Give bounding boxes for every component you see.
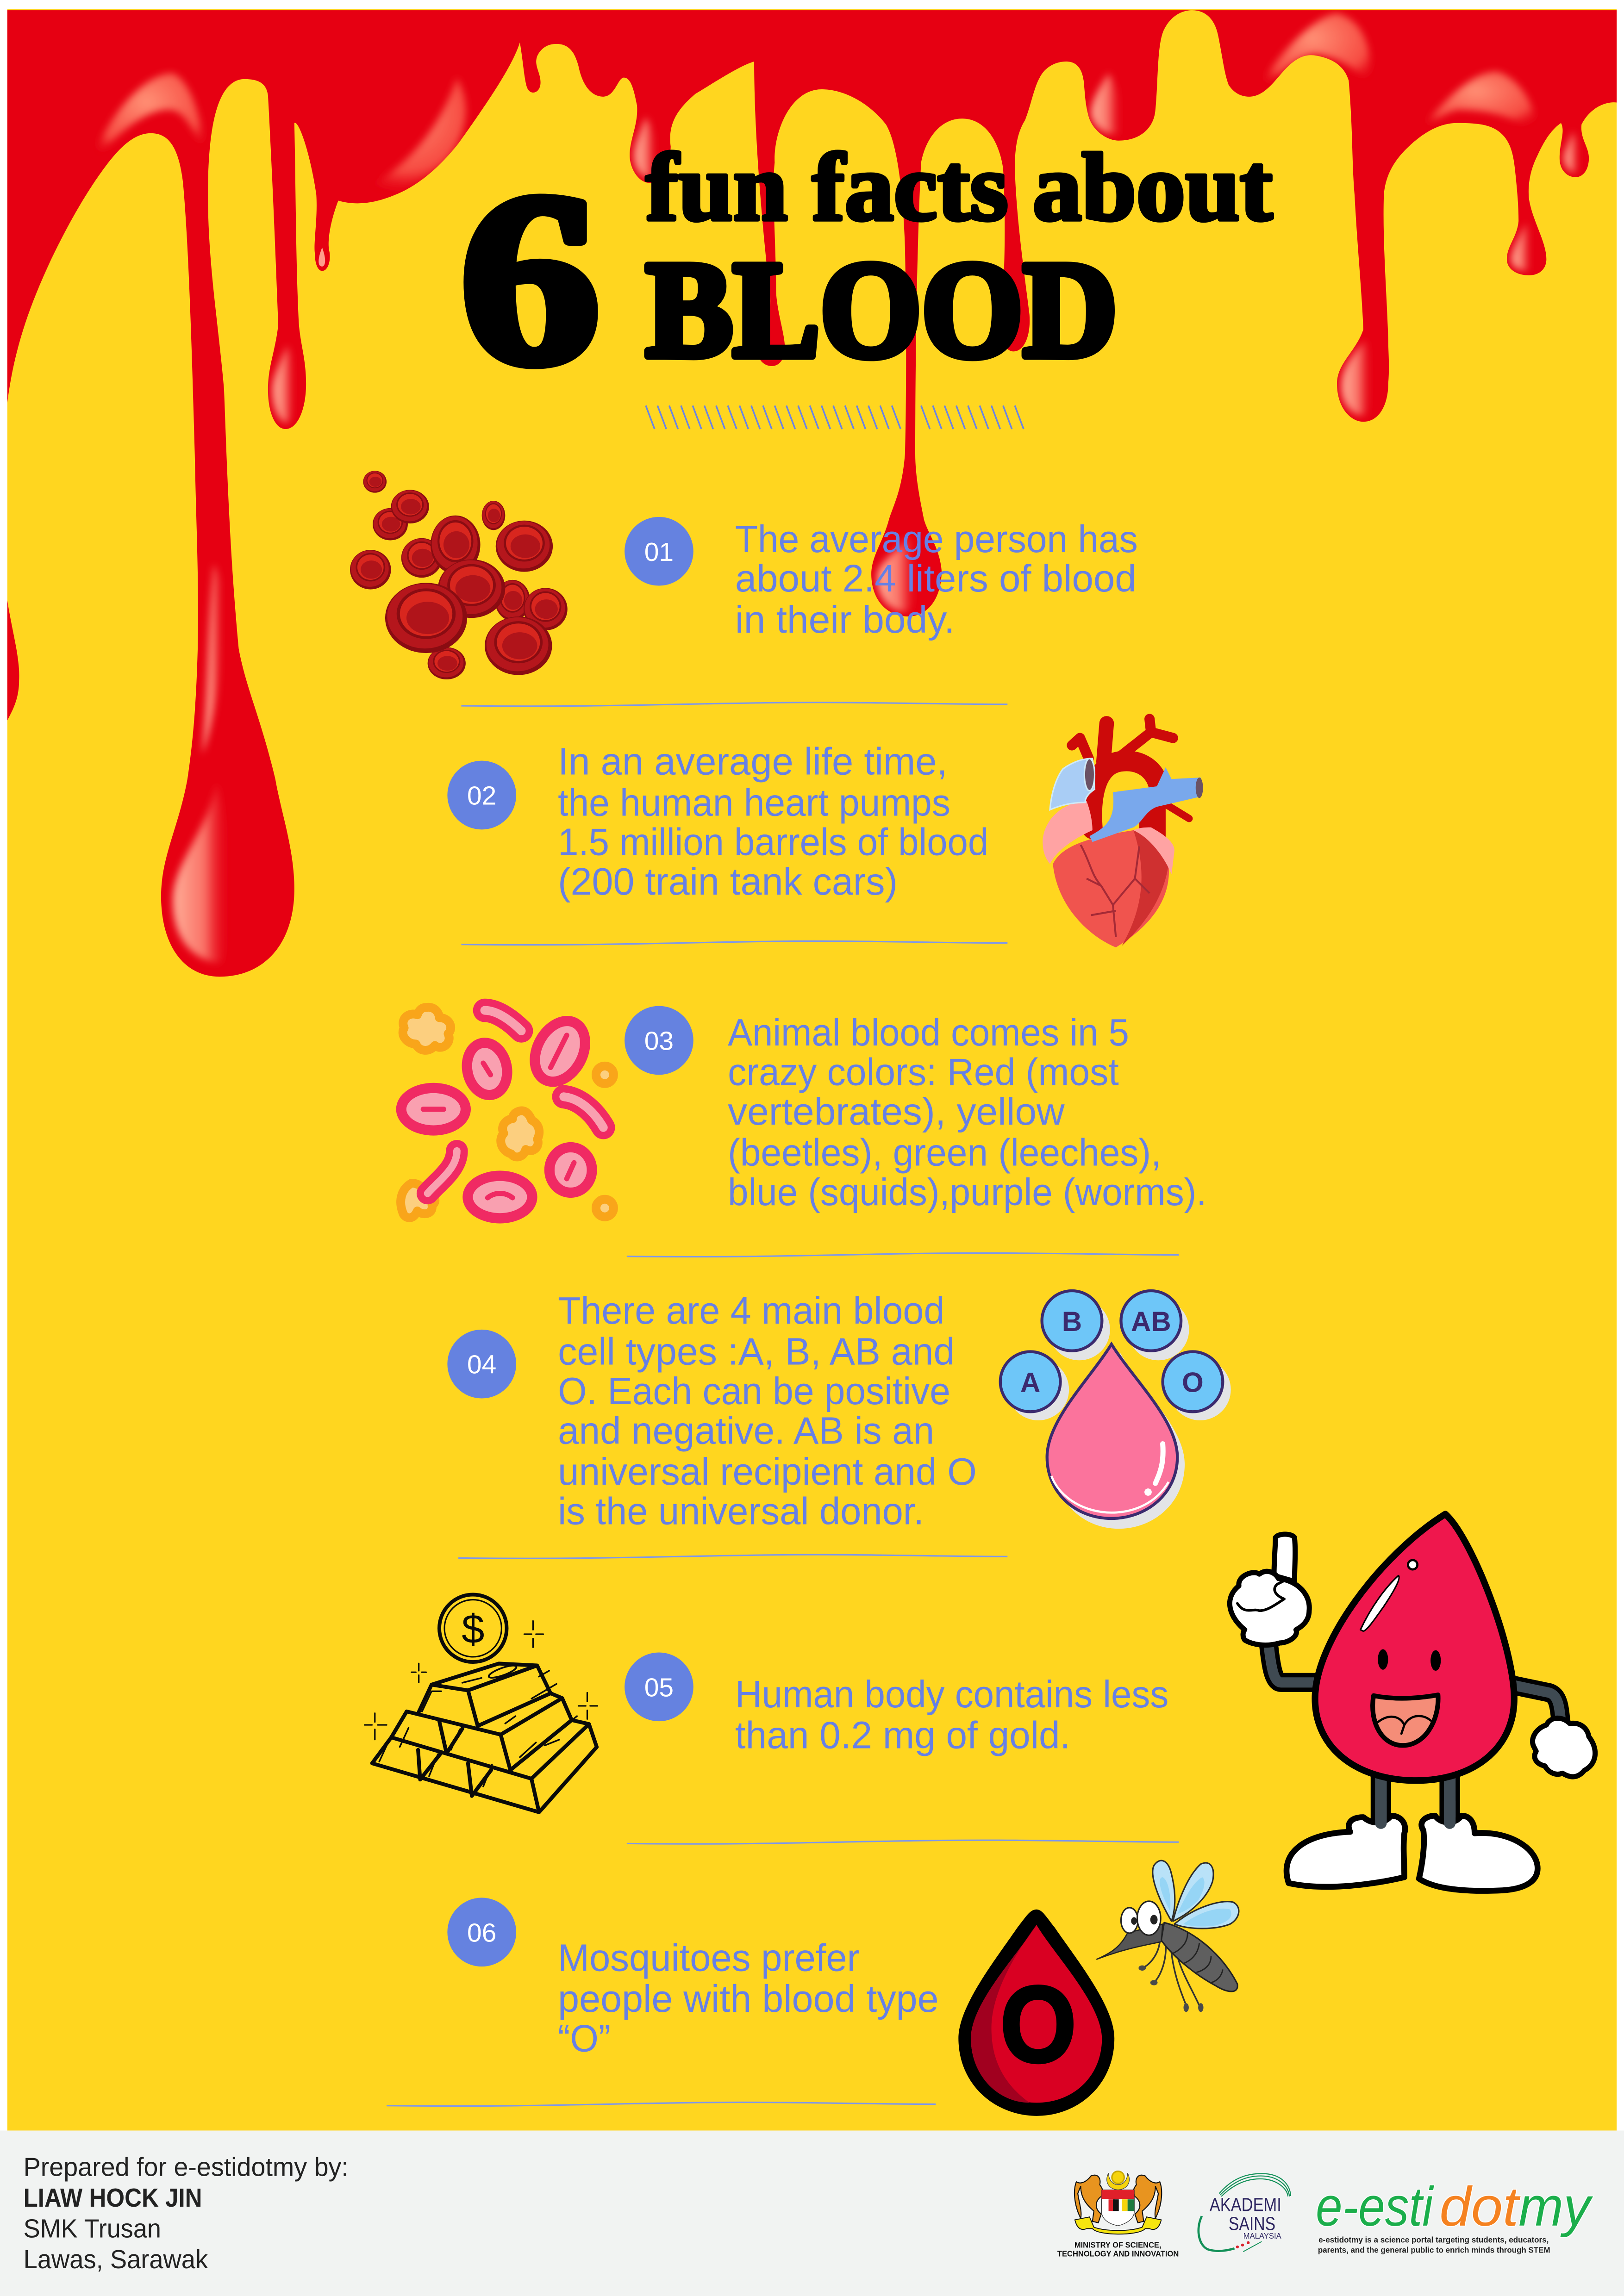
fact text 05: than 0.2 mg of gold.	[735, 1715, 1070, 1757]
number badge 03	[625, 1006, 693, 1075]
icon: red blood cells	[350, 471, 568, 679]
divider	[387, 2102, 936, 2106]
fact text 02	[558, 741, 988, 903]
panel: fact 06	[447, 1860, 1239, 2116]
blood highlights	[88, 13, 1580, 964]
logo: Ministry of Science, Technology and Innovation: MINISTRY OF SCIENCE,	[1074, 2240, 1161, 2250]
fact text 03: vertebrates), yellow	[728, 1091, 1065, 1133]
fact text 04: is the universal donor.	[558, 1491, 924, 1533]
divider	[461, 703, 1007, 706]
panel: fact 04	[447, 1290, 1231, 1533]
footer credit text: SMK Trusan	[24, 2214, 161, 2243]
icon: mosquito	[1097, 1860, 1239, 2012]
icon: blood type drop	[1000, 1291, 1231, 1529]
number badge 01: 01	[644, 537, 674, 567]
mascot mouth	[1373, 1695, 1438, 1745]
number badge 04: 04	[467, 1350, 496, 1380]
mascot body	[1315, 1514, 1514, 1780]
fact text 05	[735, 1674, 1168, 1757]
divider	[461, 941, 1007, 945]
blood type circles: O	[1182, 1367, 1204, 1398]
fact text 06: people with blood type	[558, 1978, 939, 2020]
panel: fact 02	[447, 719, 1203, 947]
blood type circles	[1000, 1291, 1223, 1412]
fact text 06	[558, 1937, 939, 2060]
logo: Akademi Sains Malaysia: AKADEMI	[1210, 2194, 1281, 2215]
footer credit text: Prepared for e-estidotmy by:	[24, 2153, 349, 2182]
mascot highlight	[1361, 1575, 1399, 1631]
panel: fact 01	[350, 471, 1138, 679]
footer credit text	[24, 2153, 349, 2274]
number badge 01	[625, 517, 693, 586]
number badge 03: 03	[644, 1027, 674, 1056]
mascot eyes	[1378, 1649, 1441, 1671]
fact text 02: the human heart pumps	[558, 782, 950, 824]
mascot shoes	[1287, 1816, 1537, 1891]
icon: type O blood drop	[958, 1910, 1114, 2116]
title: 6 fun facts about BLOOD: fun facts about	[646, 134, 1273, 241]
icon: gold bars and coin: $	[462, 1606, 484, 1652]
logo: e-estidotmy: my	[1518, 2176, 1593, 2238]
logo: Akademi Sains Malaysia: SAINS	[1229, 2213, 1275, 2234]
logo: e-estidotmy: parents, and the general public to enrich minds through STEM	[1318, 2246, 1550, 2255]
number badge 04	[447, 1330, 516, 1399]
number badge 06: 06	[467, 1918, 496, 1948]
logo: Ministry of Science, Technology and Innovation: TECHNOLOGY AND INNOVATION	[1057, 2249, 1179, 2259]
title: 6 fun facts about BLOOD	[460, 134, 1273, 415]
blood type circles: B	[1062, 1306, 1082, 1337]
number badge 02: 02	[467, 781, 496, 811]
logo: e-estidotmy: e-estidotmy is a science portal targeting students, educators,	[1318, 2236, 1549, 2245]
number badge 05: 05	[644, 1673, 674, 1702]
footer band	[0, 2130, 1624, 2296]
fact text 04: cell types :A, B, AB and	[558, 1331, 955, 1373]
fact text 03: Animal blood comes in 5	[728, 1012, 1129, 1054]
title: 6 fun facts about BLOOD: 6	[460, 142, 600, 415]
fact text 03	[728, 1012, 1206, 1213]
panel: fact 05	[365, 1594, 1168, 1812]
fact text 04	[558, 1290, 977, 1533]
fact text 06: Mosquitoes prefer	[558, 1937, 860, 1979]
mascot leg ends	[1381, 1801, 1450, 1823]
fact text 01: about 2.4 liters of blood	[735, 558, 1137, 600]
mascot sparkle	[1408, 1560, 1418, 1569]
fact text 01: The average person has	[735, 518, 1138, 560]
divider	[627, 1840, 1179, 1844]
fact text 01: in their body.	[735, 599, 955, 641]
dripping blood background	[7, 10, 1617, 977]
title underline hatching	[646, 405, 1024, 429]
mascot hands	[1230, 1534, 1595, 1777]
fact text 04: O. Each can be positive	[558, 1370, 950, 1412]
mascot limbs	[1268, 1640, 1561, 1823]
divider	[458, 1555, 1007, 1558]
fact text 04: There are 4 main blood	[558, 1290, 944, 1332]
icon: heart	[1043, 719, 1203, 947]
fact text 03: crazy colors: Red (most	[728, 1051, 1119, 1093]
illustration: blood drop mascot	[1230, 1514, 1595, 1891]
logo: e-estidotmy	[1316, 2176, 1593, 2255]
fact text 02: In an average life time,	[558, 741, 948, 783]
logo: e-estidotmy: e-esti	[1316, 2176, 1434, 2238]
fact text 02: (200 train tank cars)	[558, 861, 898, 903]
fact text 01	[735, 518, 1138, 641]
logo: e-estidotmy: dot	[1439, 2176, 1521, 2238]
logo: Akademi Sains Malaysia: MALAYSIA	[1243, 2231, 1281, 2240]
fact text 03: (beetles), green (leeches),	[728, 1132, 1161, 1174]
panel: fact 03	[401, 1006, 1206, 1218]
title: 6 fun facts about BLOOD: BLOOD	[646, 234, 1118, 386]
footer credit text: LIAW HOCK JIN	[24, 2183, 202, 2213]
icon: colourful blood cells	[401, 1007, 613, 1218]
number badge 05	[625, 1652, 693, 1721]
fact text 04: universal recipient and O	[558, 1451, 977, 1493]
divider	[627, 1253, 1179, 1257]
icon: gold bars and coin	[365, 1594, 598, 1812]
fact text 06: “O”	[558, 2018, 611, 2060]
blood type circles: AB	[1131, 1306, 1171, 1337]
footer credit text: Lawas, Sarawak	[24, 2245, 208, 2274]
blood type circles: A	[1020, 1367, 1040, 1398]
number badge 02	[447, 761, 516, 829]
logo: Akademi Sains Malaysia	[1199, 2173, 1291, 2252]
icon: type O blood drop: O	[1000, 1964, 1076, 2085]
number badge 06	[447, 1898, 516, 1966]
fact text 04: and negative. AB is an	[558, 1410, 934, 1452]
logo: Ministry of Science, Technology and Innovation	[1057, 2171, 1179, 2259]
fact text 05: Human body contains less	[735, 1674, 1168, 1716]
fact text 02: 1.5 million barrels of blood	[558, 821, 988, 864]
fact text 03: blue (squids),purple (worms).	[728, 1171, 1206, 1213]
